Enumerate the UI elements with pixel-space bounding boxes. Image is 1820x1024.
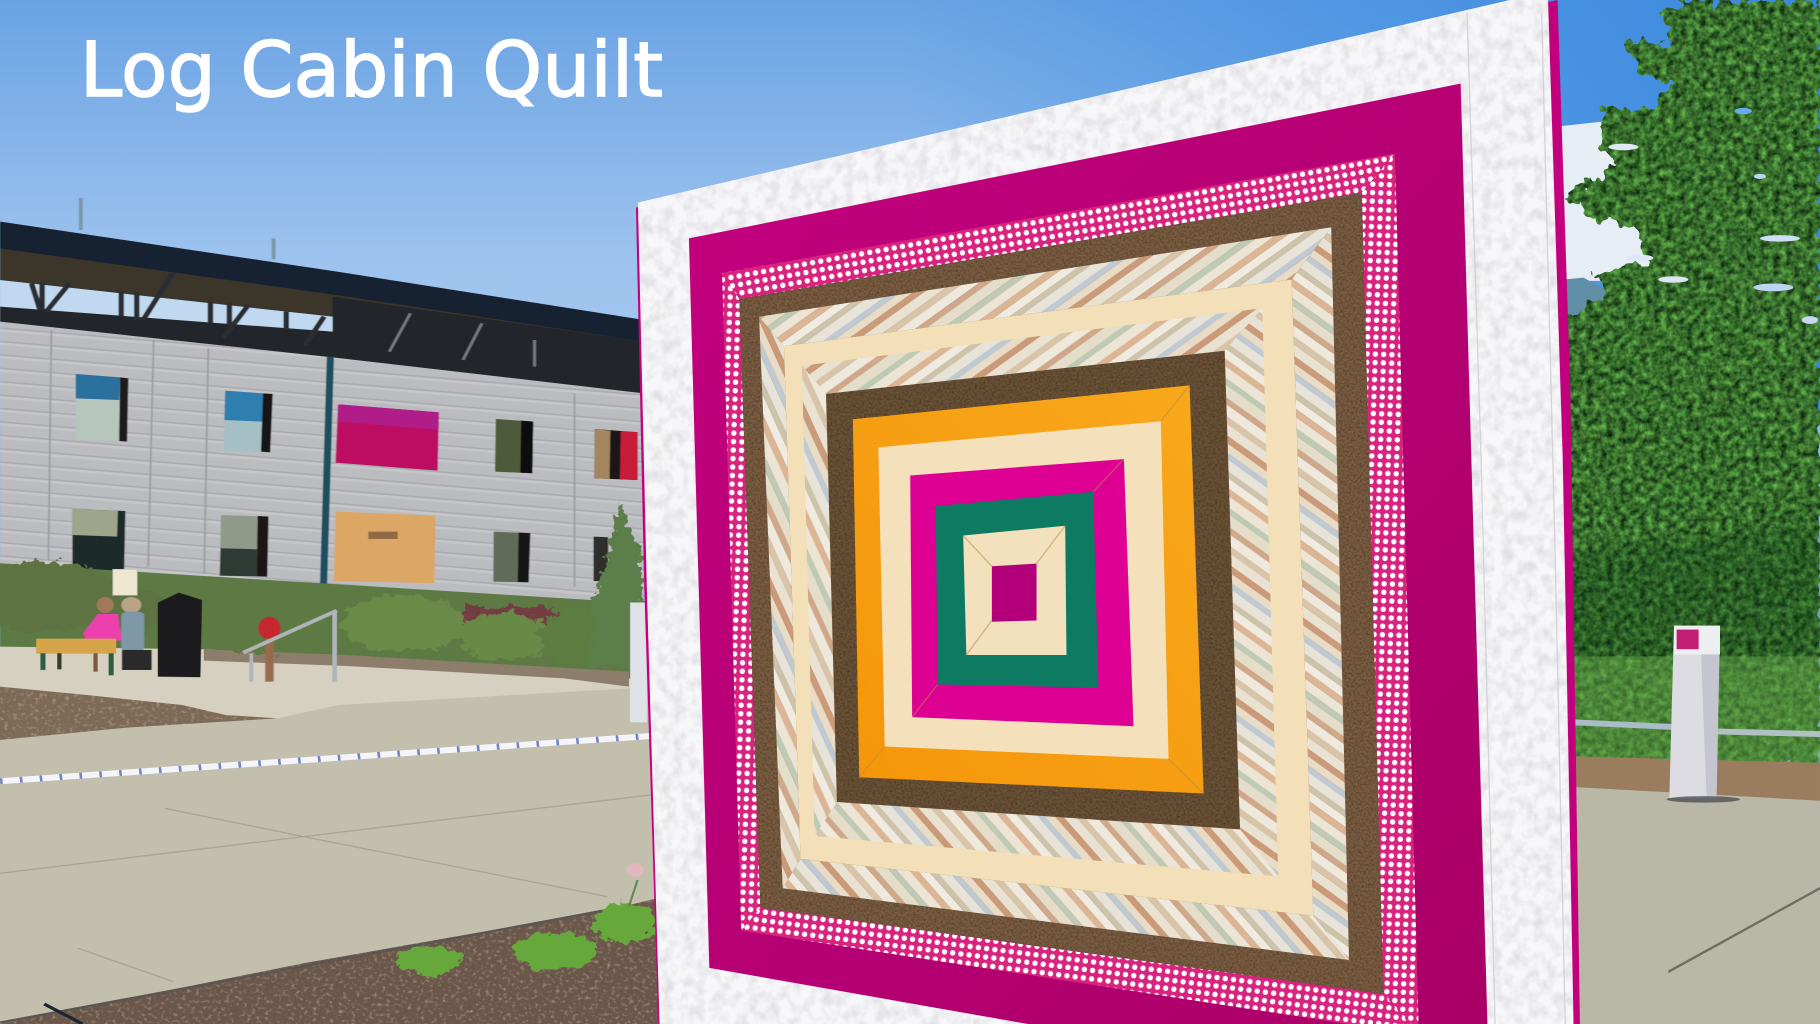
sky — [0, 0, 1820, 420]
pavement right — [1573, 787, 1820, 1024]
hedge — [1560, 660, 1820, 767]
black cable — [44, 1004, 82, 1024]
outer brown strip — [739, 193, 1383, 994]
distant hills — [1550, 278, 1640, 379]
green plants — [397, 903, 657, 975]
tree foliage — [1560, 0, 1820, 679]
drain pipe — [323, 357, 330, 595]
bed edge — [0, 908, 616, 1023]
building wall — [0, 322, 644, 620]
dotted border — [722, 153, 1419, 1024]
miter seams — [859, 385, 1204, 794]
tree shading and sky gaps — [1560, 108, 1820, 673]
center cream strip — [963, 526, 1066, 655]
center magenta square — [992, 564, 1036, 622]
person in red — [258, 617, 280, 682]
orange wall panel — [334, 512, 436, 583]
inner brown strip — [826, 351, 1240, 829]
inner cream strip — [878, 421, 1169, 759]
pavement joints — [0, 795, 651, 982]
title: Log Cabin Quilt — [80, 26, 663, 114]
roof structure — [0, 198, 644, 393]
border seam — [1467, 13, 1565, 1024]
white outer border — [638, 0, 1574, 1024]
dirt patch — [0, 687, 278, 740]
cream strip — [784, 280, 1313, 916]
mulch bed — [0, 897, 664, 1024]
black bin — [158, 593, 202, 677]
magenta binding — [636, 0, 1580, 1024]
main concrete — [0, 687, 664, 1024]
magenta border — [689, 84, 1487, 1024]
inner printed strips — [802, 308, 1278, 876]
notice sign — [113, 569, 137, 595]
windows upper row — [76, 374, 638, 480]
metal handrail — [243, 611, 337, 682]
concrete curb — [204, 649, 629, 687]
trees and far building on the right — [1550, 0, 1820, 1024]
hedge behind railing — [202, 503, 642, 667]
white bollard — [1667, 626, 1740, 803]
wooden bench — [36, 639, 116, 675]
flower — [627, 863, 644, 907]
quilt — [636, 0, 1580, 1024]
foreground ground left — [0, 647, 664, 1024]
magenta strip — [910, 459, 1133, 726]
upper pavement — [0, 647, 664, 740]
far white building — [1550, 116, 1707, 281]
barrier tape — [0, 736, 651, 781]
left shrubs — [0, 562, 164, 633]
magenta wall panel — [335, 404, 439, 471]
background building — [0, 198, 644, 620]
outer printed strips — [759, 227, 1349, 960]
white post — [630, 602, 647, 722]
pavement crack — [1668, 888, 1820, 972]
courtyard details — [0, 503, 647, 722]
seated people — [83, 597, 152, 670]
green strip — [936, 492, 1098, 688]
mulch strip — [1573, 756, 1820, 802]
guard rail — [1573, 722, 1820, 734]
orange strip — [853, 385, 1204, 794]
windows lower row — [72, 509, 608, 582]
planting band behind pavement — [0, 563, 644, 687]
